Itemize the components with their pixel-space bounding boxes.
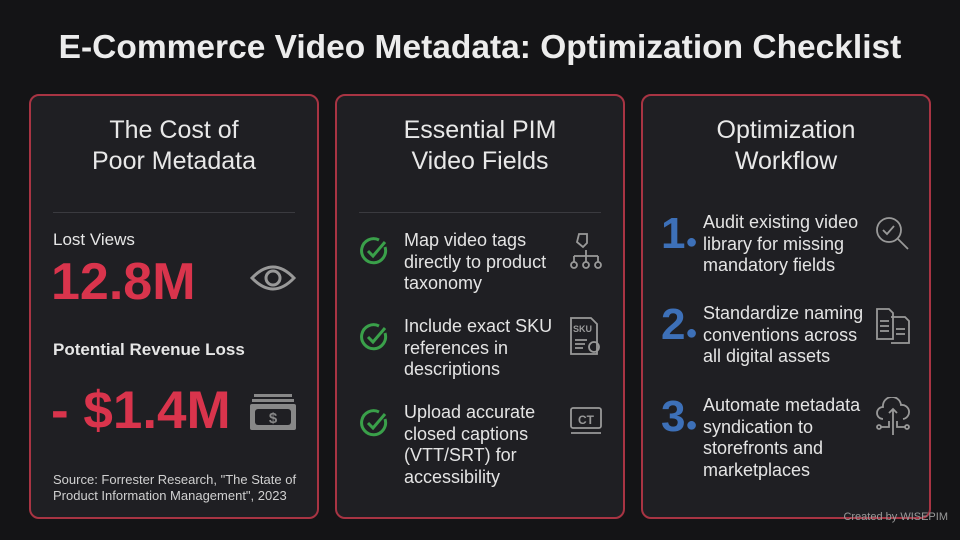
heading: Essential PIM [404,116,556,144]
item 2: references in [404,338,508,358]
item 1 [360,230,602,293]
icon: money: $ [269,410,278,427]
step 2: conventions across [703,324,857,344]
stat: 12.8M: 12.8M [51,253,196,311]
source note: Product Information Management", 2023 [53,488,287,503]
step 3: 3● [661,392,698,441]
step 1 [661,209,908,275]
step 3: Automate metadata [703,395,860,415]
step 2: 2● [661,300,698,349]
icon: check [360,409,388,436]
icon: check [360,323,388,350]
icon: money [250,394,296,430]
item 1: directly to product [404,252,546,272]
item 3: (VTT/SRT) for [404,445,517,465]
panel: essential PIM video fields [335,94,625,519]
icon: CC: CT [578,413,595,427]
step 1: library for missing [703,234,844,254]
step 3: storefronts and [703,438,823,458]
label: revenue loss: Potential Revenue Loss [53,340,245,359]
panel: optimization workflow [641,94,931,519]
heading: The Cost of [109,116,239,144]
step 1: 1● [661,209,698,258]
heading: Video Fields [411,147,549,175]
heading [404,116,556,175]
icon: SKU document [570,317,600,355]
item 3: closed captions [404,424,528,444]
heading: Poor Metadata [92,147,256,175]
item 3: Upload accurate [404,402,535,422]
icon: check [360,237,388,264]
credit: Created by WISEPIM [843,511,948,523]
item 2 [360,316,600,379]
step 2: all digital assets [703,346,830,366]
icon: cloud upload [876,397,910,435]
step 2: Standardize naming [703,303,863,323]
icon: magnifier check [876,217,908,250]
item 2: Include exact SKU [404,316,552,336]
label: lost views: Lost Views [53,230,135,249]
heading [92,116,256,175]
icon: CC [570,407,602,434]
step 1: mandatory fields [703,255,835,275]
item 1: Map video tags [404,230,526,250]
heading: Optimization [717,116,855,144]
stat: -$1.4M: - $1.4M [51,381,231,440]
step 1: Audit existing video [703,212,858,232]
source note: Source: Forrester Research, "The State of [53,472,296,487]
item 3: accessibility [404,466,500,486]
step 3: marketplaces [703,460,810,480]
heading: Workflow [735,147,837,175]
title: E-Commerce Video Metadata: Optimization Checklist [59,29,901,66]
item 3 [360,402,602,487]
item 2: descriptions [404,359,500,379]
source note [53,472,296,503]
step 3 [661,392,910,480]
icon: eye [250,266,296,290]
item 1: taxonomy [404,273,482,293]
icon: tag hierarchy [570,233,602,269]
step 3: syndication to [703,416,813,436]
panel: cost of poor metadata [29,94,319,519]
step 2 [661,300,910,366]
icon: documents [876,308,910,344]
icon: SKU document: SKU [573,324,592,334]
heading [717,116,855,175]
